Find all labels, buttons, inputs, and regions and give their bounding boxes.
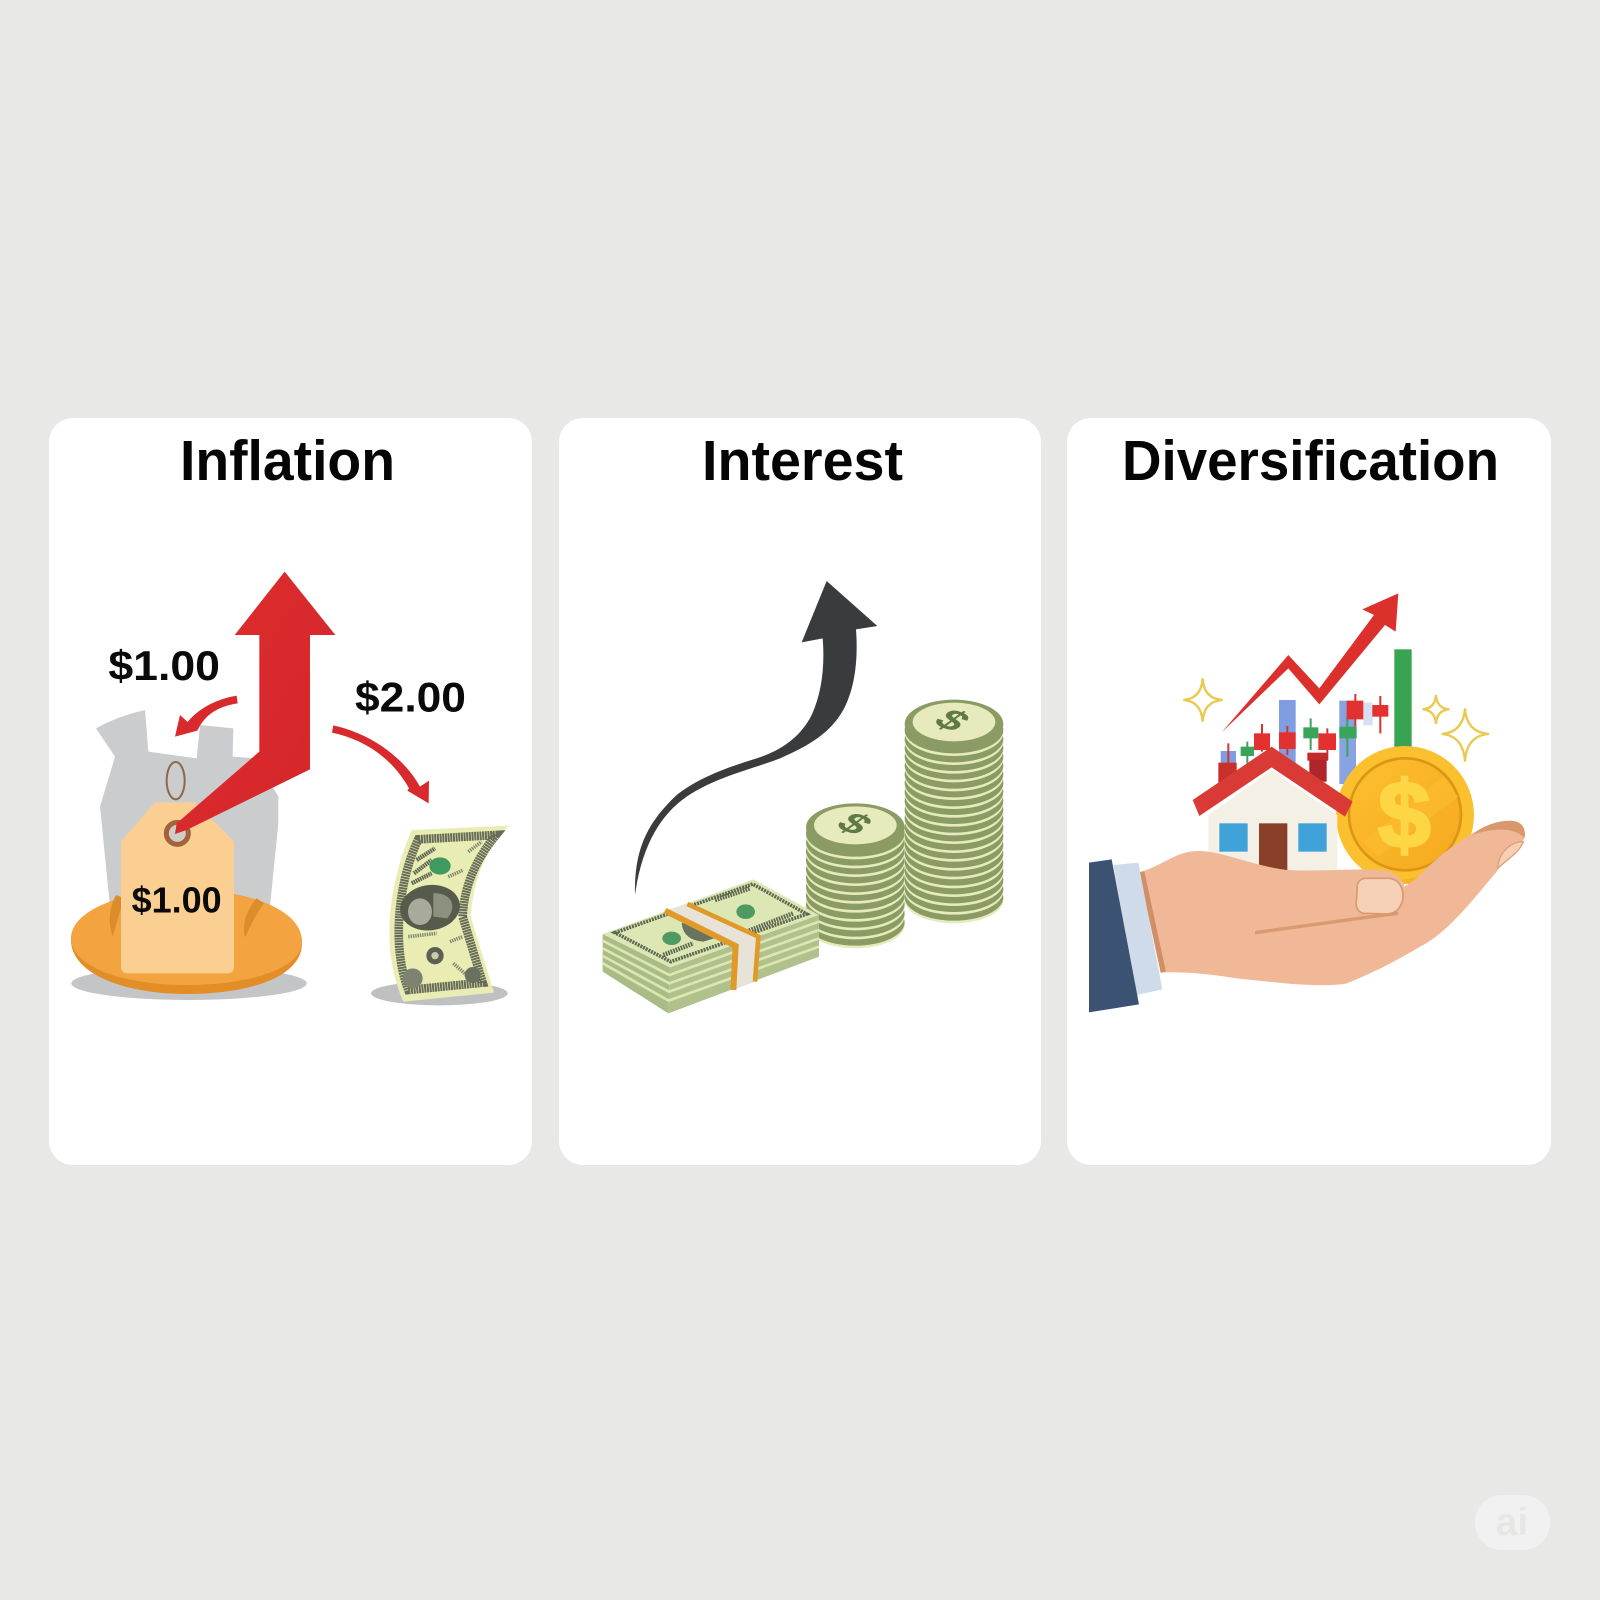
bar chart and candlesticks	[1221, 649, 1412, 784]
coin stack: tall: $	[924, 703, 980, 737]
heading: diversification: Diversification	[1122, 429, 1499, 493]
interest card	[559, 418, 1041, 1165]
old price label: $1.00	[108, 642, 220, 689]
inflation card	[49, 418, 532, 1165]
diversification card	[1067, 418, 1551, 1165]
tag string	[167, 762, 185, 799]
icon: grocery bag	[96, 710, 278, 907]
coin stack: short: $	[827, 807, 882, 841]
bill shadow	[371, 981, 508, 1005]
cash bundle	[603, 879, 819, 1013]
icon: house	[1193, 747, 1353, 872]
icon: gold coin: $	[1378, 762, 1431, 868]
sparkles	[1183, 678, 1489, 762]
watermark badge: ai	[1496, 1501, 1528, 1544]
small arrow to bill	[332, 725, 429, 803]
bread shadow	[71, 967, 307, 1000]
tag eyelet	[166, 822, 188, 844]
suit sleeve	[1089, 859, 1139, 1012]
shirt cuff	[1113, 863, 1162, 995]
curved growth arrow	[635, 581, 877, 895]
watermark badge	[1475, 1495, 1550, 1550]
panel: diversification	[1067, 418, 1551, 1165]
coin stack: tall	[905, 700, 1003, 923]
panel: inflation	[49, 418, 532, 1165]
diversification illustration	[1089, 593, 1525, 1012]
inflation illustration	[71, 572, 508, 1005]
red growth zigzag arrow	[1222, 593, 1398, 732]
tag price: $1.00	[132, 880, 222, 921]
paper band	[665, 904, 759, 990]
panel: interest	[559, 418, 1041, 1165]
big red up arrow	[175, 572, 335, 834]
icon: bread loaf	[71, 890, 302, 994]
heading: interest: Interest	[702, 429, 903, 493]
heading: inflation: Inflation	[180, 429, 395, 493]
icon: dollar bill	[389, 826, 508, 1002]
icon: price tag	[121, 802, 234, 973]
new price label: $2.00	[355, 674, 466, 721]
small arrow to bag	[175, 696, 238, 737]
coin stack: short	[806, 803, 905, 948]
icon: gold coin	[1336, 746, 1474, 886]
interest illustration	[603, 581, 1003, 1013]
chimneys	[1218, 753, 1328, 783]
icon: open hand	[1142, 821, 1525, 985]
